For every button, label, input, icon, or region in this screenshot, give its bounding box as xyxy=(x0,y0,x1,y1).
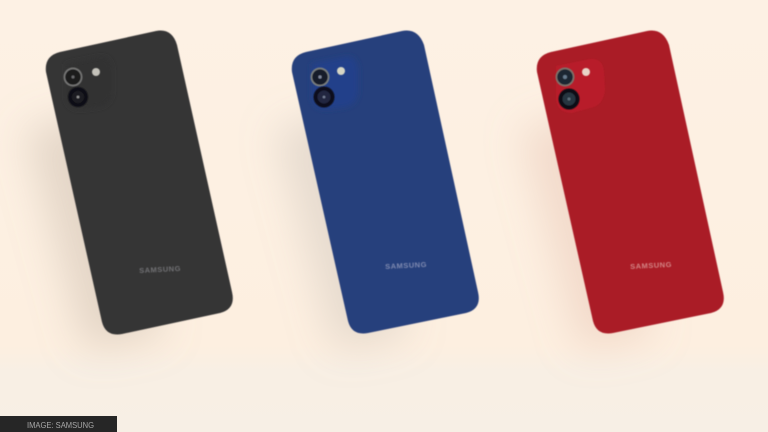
black camera module xyxy=(66,57,112,109)
blue upper lens xyxy=(310,68,330,86)
red flash xyxy=(582,68,590,76)
black lower lens xyxy=(68,87,88,107)
black flash xyxy=(92,68,100,76)
red upper lens xyxy=(556,68,574,86)
black samsung logo: SAMSUNG xyxy=(139,264,181,275)
red camera module xyxy=(556,59,605,113)
blue lower lens xyxy=(314,86,334,108)
blue flash xyxy=(337,67,345,75)
phone: red xyxy=(537,31,724,334)
blue samsung logo: SAMSUNG xyxy=(385,260,427,271)
red phone body xyxy=(537,31,724,334)
blue phone body xyxy=(292,31,479,334)
blue camera module xyxy=(312,57,358,109)
phone: black xyxy=(46,31,233,335)
image credit caption xyxy=(0,416,117,432)
black phone body xyxy=(46,31,233,335)
phone shadows xyxy=(25,110,655,350)
red samsung logo: SAMSUNG xyxy=(630,260,672,271)
black upper lens xyxy=(64,68,82,86)
red lower lens xyxy=(558,88,580,110)
image credit caption: IMAGE: SAMSUNG xyxy=(27,420,94,430)
phone: blue xyxy=(292,31,479,334)
